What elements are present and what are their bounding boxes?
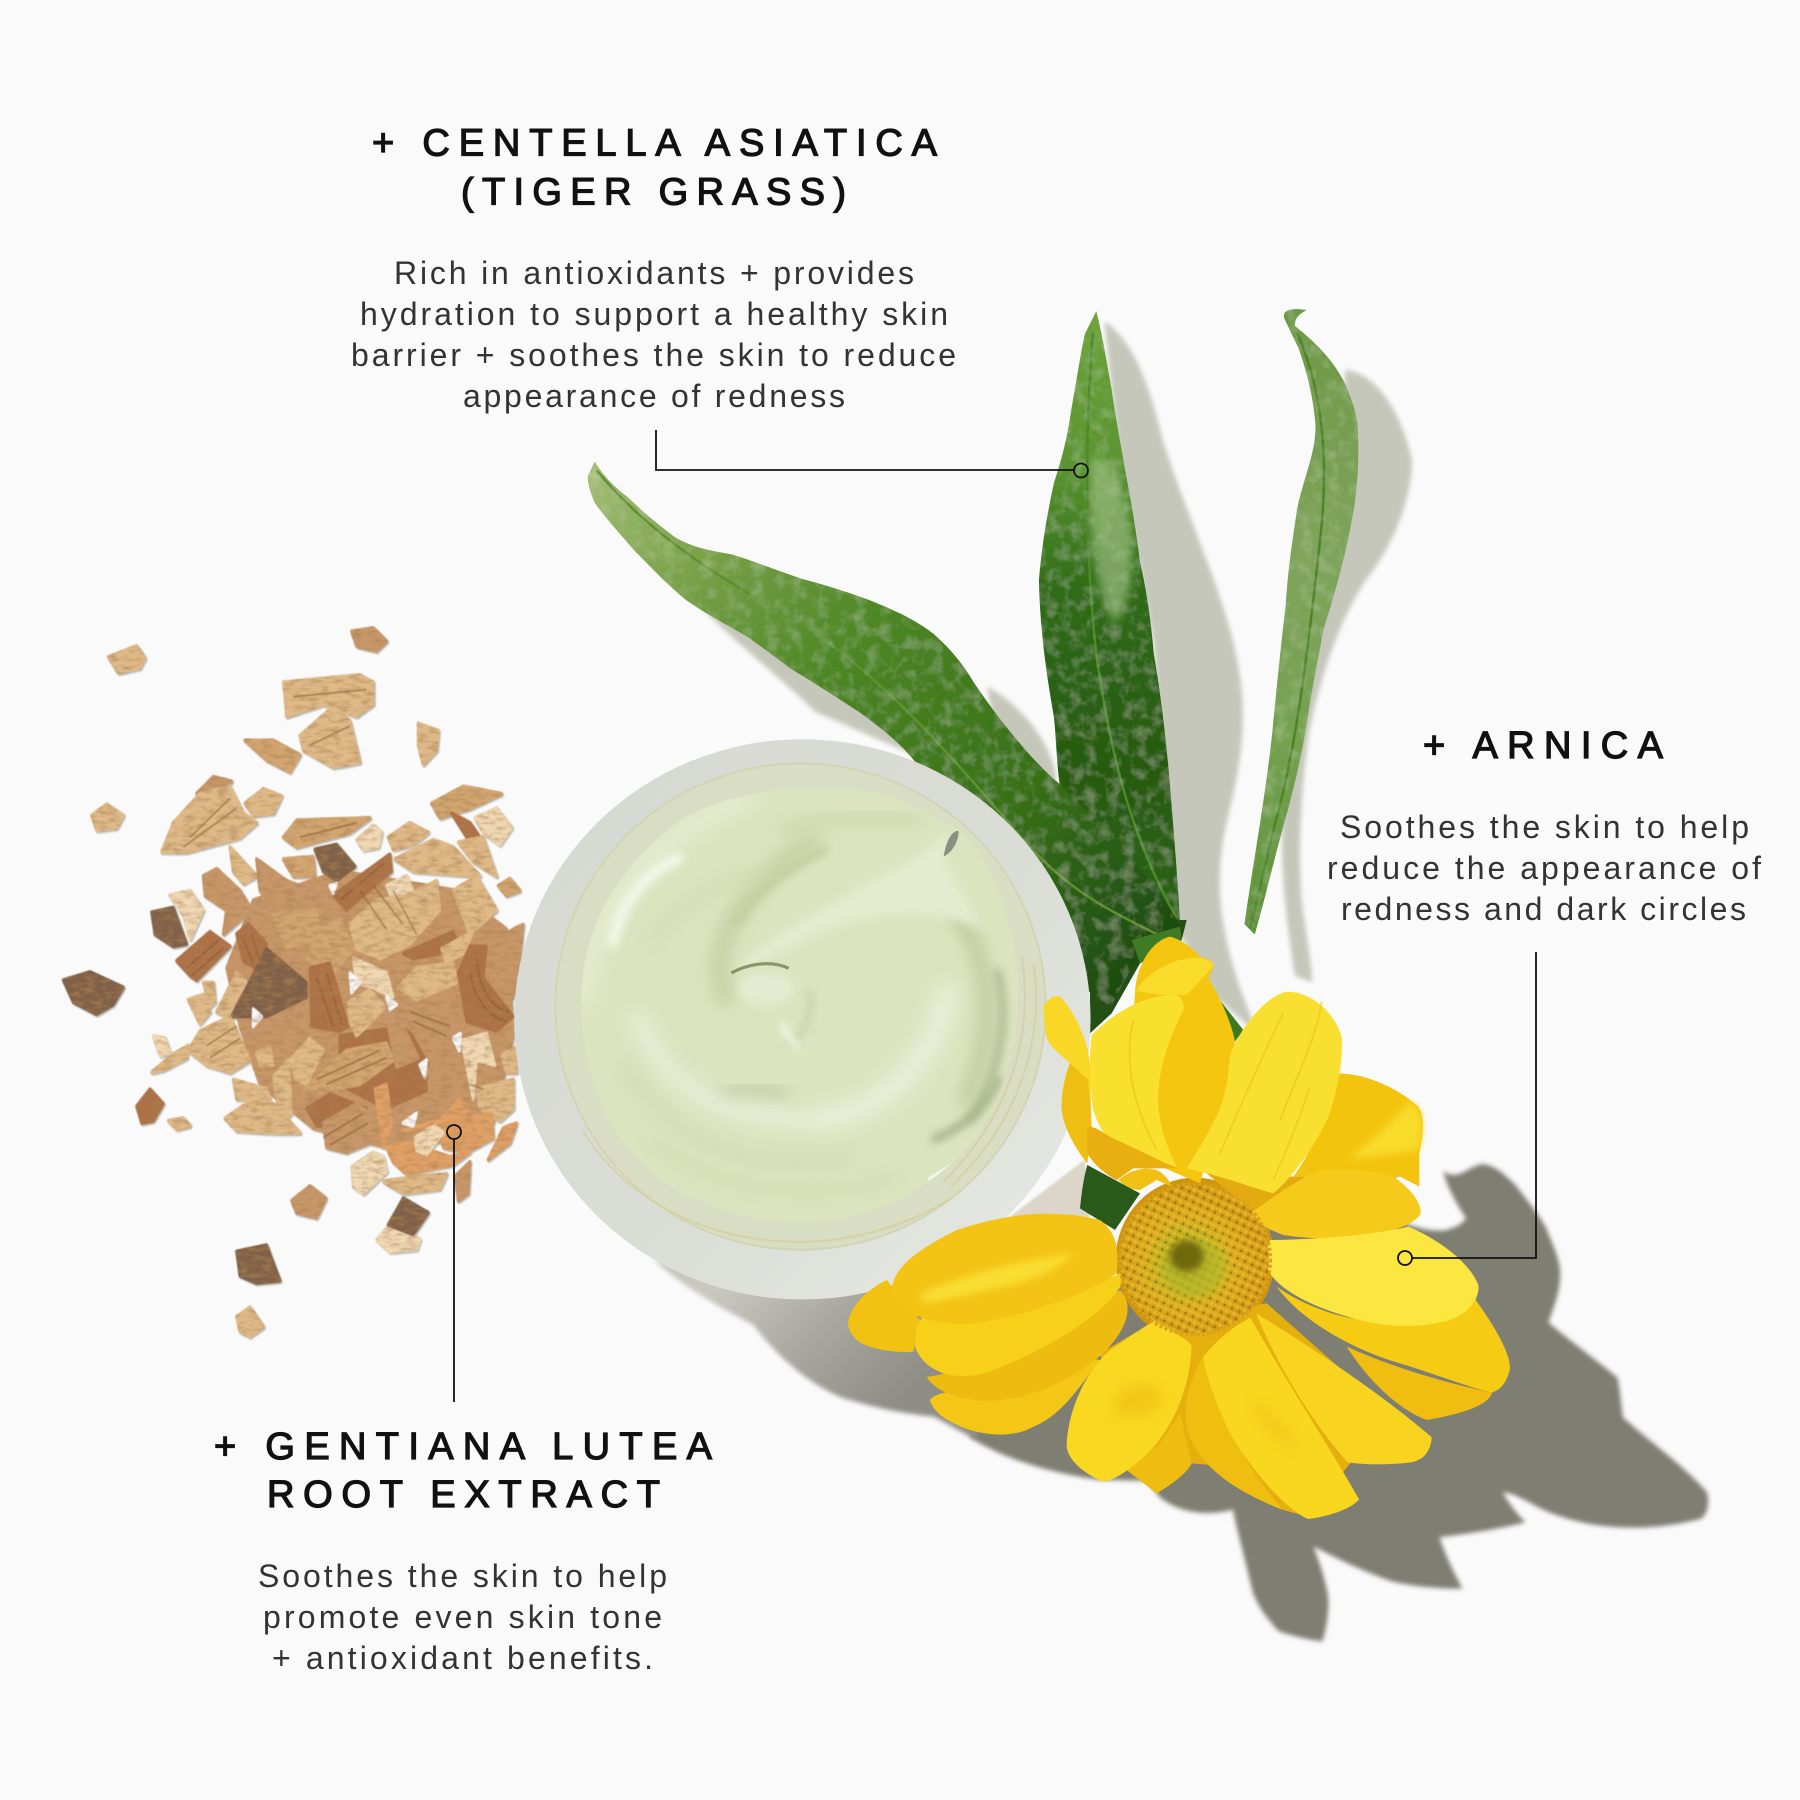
arnica flower	[848, 927, 1510, 1519]
heading: centella asiatica: + CENTELLA ASIATICA	[372, 122, 938, 164]
long left leaf	[588, 461, 1182, 1007]
body text: centella asiatica: appearance of redness	[463, 378, 845, 414]
thin right leaf	[1244, 309, 1358, 934]
centre leaf highlight	[1091, 458, 1132, 621]
left leaf midrib	[597, 471, 1159, 936]
stem behind flower	[1080, 1165, 1140, 1230]
heading: centella asiatica	[372, 122, 938, 214]
upper petals	[1087, 992, 1342, 1193]
disc eye	[1170, 1241, 1203, 1271]
heading: arnica: + ARNICA	[1423, 725, 1664, 767]
body text: arnica	[1327, 809, 1761, 927]
back petals	[848, 937, 1510, 1510]
body text: centella asiatica: hydration to support a healthy skin	[360, 296, 948, 332]
connector: gentiana to root	[447, 1125, 461, 1402]
green inner ring	[1162, 1240, 1225, 1297]
body text: gentiana lutea: promote even skin tone	[263, 1599, 662, 1635]
centre leaf midrib	[1087, 333, 1177, 918]
disc florets	[1121, 1185, 1269, 1333]
callout: centella asiatica	[351, 122, 1088, 478]
body text: gentiana lutea: Soothes the skin to help	[258, 1558, 667, 1594]
illustration: jar, leaves, flower and root pieces	[63, 309, 1708, 1642]
chip ridges	[183, 690, 510, 1145]
body text: centella asiatica	[351, 255, 956, 414]
heading: gentiana lutea: ROOT EXTRACT	[267, 1474, 660, 1516]
disc base	[1121, 1185, 1269, 1333]
soft warm shadow between jar and flower	[987, 1159, 1091, 1257]
dimple mound	[738, 972, 793, 1005]
leaf shadows	[700, 321, 1412, 1033]
lower petals	[1067, 1313, 1432, 1519]
stem strip between petals	[1218, 998, 1243, 1042]
glass insert	[555, 763, 1046, 1250]
centre leaf	[1039, 311, 1180, 924]
heading: gentiana lutea: + GENTIANA LUTEA	[214, 1426, 713, 1468]
left leaf shadow	[700, 606, 1056, 804]
cosmetic jar	[514, 739, 1091, 1299]
backing behind lower petals	[1100, 1303, 1413, 1517]
backing behind right petals	[1207, 1173, 1400, 1213]
centre leaf shadow	[1104, 321, 1257, 1033]
heading: gentiana lutea	[214, 1426, 713, 1516]
filler pieces under the main pile	[227, 871, 513, 1152]
flower cast shadow	[970, 1164, 1708, 1642]
left petals	[892, 1214, 1128, 1435]
flower centre disc	[1121, 1185, 1269, 1333]
callout: arnica	[1327, 725, 1761, 1265]
body text: arnica: reduce the appearance of	[1327, 850, 1761, 886]
body text: centella asiatica: Rich in antioxidants + provides	[394, 255, 914, 291]
right petals	[1250, 1169, 1479, 1326]
dimple	[731, 964, 789, 973]
body text: arnica: Soothes the skin to help	[1340, 809, 1749, 845]
jar contents	[555, 763, 1046, 1250]
jar cast shadow	[654, 1260, 999, 1440]
body text: gentiana lutea: + antioxidant benefits.	[272, 1640, 653, 1676]
body text: arnica: redness and dark circles	[1341, 891, 1746, 927]
jar rim	[514, 739, 1091, 1299]
glass ridges	[583, 957, 1036, 1242]
cream fold crest	[731, 831, 982, 973]
connector: centella to leaf	[656, 430, 1088, 478]
gaps showing the white surface	[420, 1060, 427, 1077]
connector: arnica to petal	[1398, 952, 1536, 1265]
root pieces	[63, 628, 523, 1336]
right leaf shadow	[1282, 370, 1412, 983]
heading: centella asiatica: (TIGER GRASS)	[461, 172, 846, 214]
body text: gentiana lutea	[258, 1558, 667, 1676]
leaf highlight near flower	[1132, 927, 1182, 963]
backing behind disc	[1116, 1178, 1274, 1341]
callout: gentiana lutea	[214, 1125, 713, 1676]
leaf base behind flower	[1057, 920, 1187, 1033]
right leaf midrib	[1250, 333, 1324, 928]
disc fringe	[1121, 1185, 1269, 1333]
petal creases	[1129, 1002, 1322, 1180]
cream peak tip	[944, 831, 959, 856]
body text: centella asiatica: barrier + soothes the skin to reduce	[351, 337, 956, 373]
cream body	[581, 788, 1018, 1222]
cream swirl shading	[583, 799, 1003, 1191]
